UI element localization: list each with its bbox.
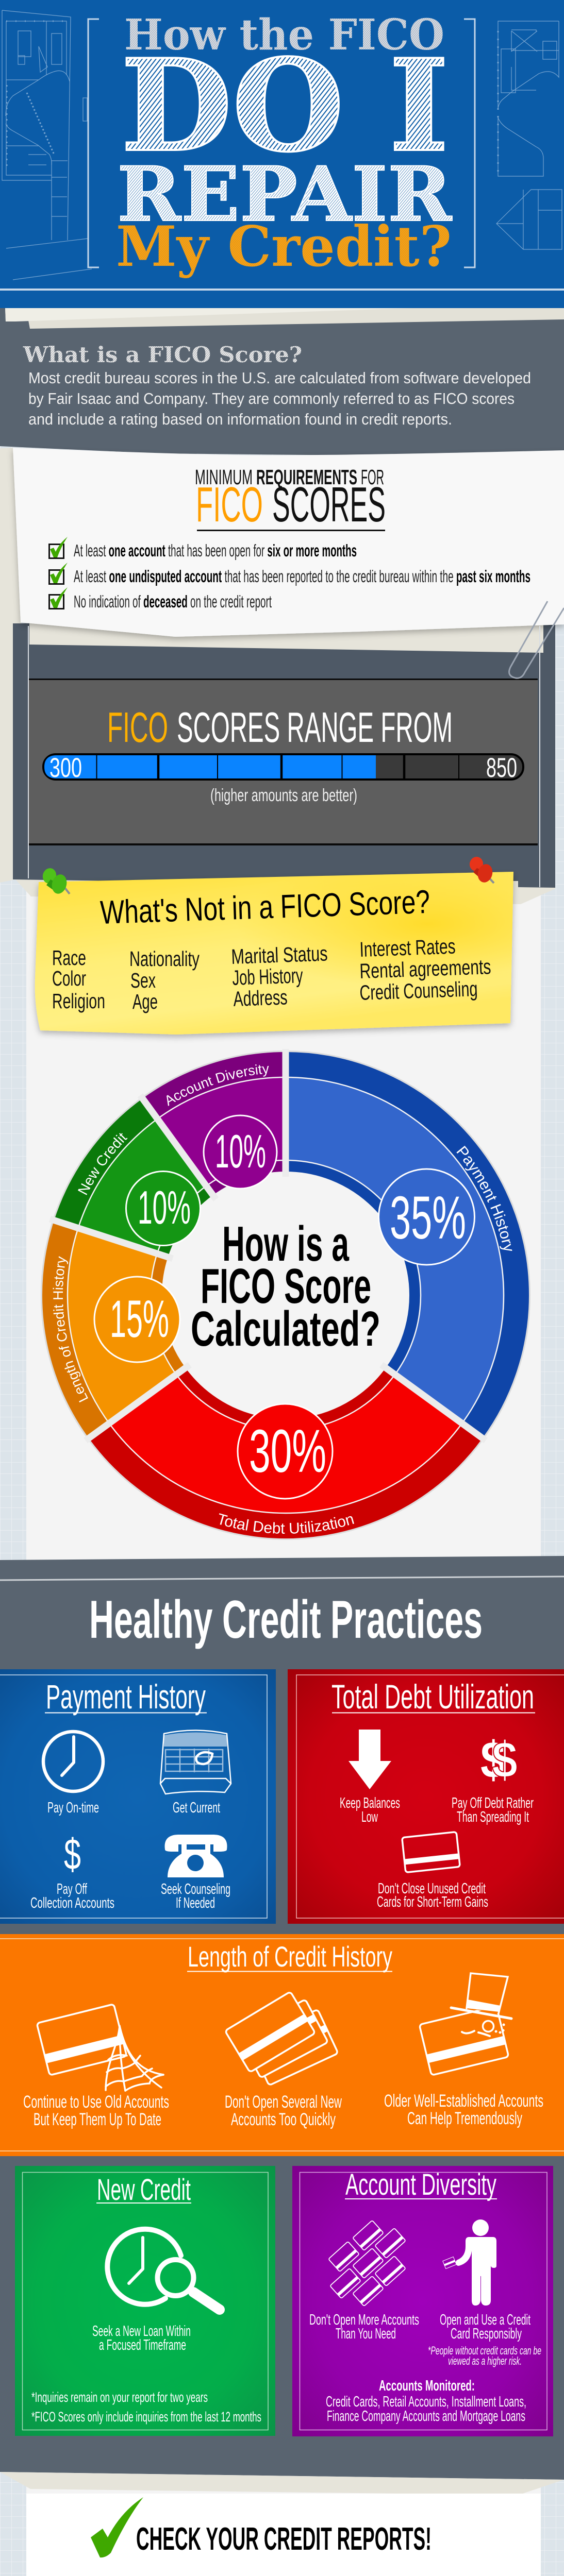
item: one account [49,537,357,560]
icon: card with top hat and monocle [419,1973,511,2075]
badge: 30%: 30% [249,1417,326,1485]
label: Don't Open Several New Accounts: Don't Open Several New [225,2092,342,2112]
panel: total debt utilization [288,1669,564,1924]
chart: FICO score donut [41,1050,530,1540]
icon: green check [91,2497,143,2557]
icon: down arrow [349,1730,391,1789]
badge: new credit 10% [126,1172,200,1246]
icon: stack of cards [225,1992,338,2086]
label: Seek Counseling If Needed: Seek Counseling [161,1881,230,1897]
list columns: Nationality [129,947,200,971]
label: Seek a New Loan: Seek a New Loan Within [92,2323,191,2340]
range bar: 300 [49,753,82,783]
panel: check your credit reports [26,2494,541,2576]
title brackets [88,19,475,267]
title: How the FICO: How the FICO [124,10,444,60]
label: Keep Balances Low [340,1795,400,1825]
center title: How is a [222,1216,349,1272]
range bar: 850 [486,753,517,783]
list columns: Marital Status [231,941,328,969]
heading: minimum requirements for: FOR [361,465,384,489]
note: higher risk: viewed as a higher risk. [448,2354,522,2367]
center title [191,1216,380,1357]
label: Total Debt Utilization: Total Debt Utilization [219,1513,354,1534]
badge: 35%: 35% [390,1184,466,1252]
white paper page [26,876,541,2576]
label: Don't Open More Accounts: Don't Open More Accounts [309,2312,419,2328]
label: Keep Balances Low: Keep Balances [340,1795,400,1811]
label: Don't Open Several New Accounts: Accounts Too Quickly [231,2110,336,2129]
segment: length of credit history 15% [29,1039,542,1551]
segment: account diversity 10% [29,1039,542,1551]
list columns: Rental agreements [359,955,491,983]
label: Don't Close Unused Credit Cards [377,1880,488,1910]
label: Don't Open More Accounts: Than You Need [336,2326,396,2342]
icon: seven cards [328,2221,406,2306]
panel: new credit [15,2166,275,2436]
list columns: Interest Rates [359,935,456,961]
label: Continue to Use Old Accounts: But Keep Them Up To Date [34,2110,161,2129]
sticky note: what's not in a FICO score [35,855,513,1035]
slate clipboard panel [13,623,555,888]
icon: double dollar: $ [492,1731,518,1789]
icon: red push pin [468,855,494,884]
label: Pay Off Collection Accounts [30,1881,114,1911]
footnotes: *Inquiries remain on your report for two years [31,2389,208,2405]
accounts monitored list [326,2378,526,2425]
intro paragraph [28,369,531,428]
label: Don't Close Unused Credit Cards: Don't Close Unused Credit [378,1880,486,1897]
label: Continue to Use Old Accounts: Continue to Use Old Accounts [23,2092,169,2112]
label: Pay Off Debt Rather Than Spreading It [452,1795,534,1825]
beige paper under requirements [29,613,543,653]
heading: minimum requirements for: MINIMUM [195,465,253,489]
label: Pay Off Collection Accounts: Pay Off [57,1881,88,1897]
list columns: Race [52,946,86,970]
label: Get Current: Get Current [173,1800,220,1816]
panel: payment history [0,1669,276,1924]
section: healthy credit practices background [0,1556,564,2480]
label: Seek a New Loan [92,2323,191,2353]
label: Keep Balances Low: Low [361,1809,378,1825]
badge: account diversity 10% [204,1115,277,1189]
panel: minimum requirements paper [13,448,564,637]
list columns: Address [233,985,288,1011]
item: one account: At least one account that has been open for six or more months [74,541,357,560]
heading: FICO scores range from [107,703,453,751]
label: Don't Open More Accounts [309,2312,419,2342]
label: Open and Use a Credit Card [440,2312,530,2342]
icon: calendar [160,1730,231,1794]
icon: card with cobweb [37,2004,163,2091]
heading: FICO scores range from: FICO [107,703,168,751]
list columns: Credit Counseling [359,977,478,1005]
heading: minimum requirements for [195,465,384,489]
heading: What is a FICO Score?: What is a FICO Score? [23,342,302,367]
range bar [43,753,523,783]
list columns: Color [52,967,86,990]
blueprint drawing: left floor plan [2,10,92,280]
gray intro section with paper edges [0,308,564,904]
beige paper below practices [0,2472,564,2495]
label: Pay Off Collection Accounts: Collection Accounts [30,1895,114,1911]
icon: credit card [402,1832,460,1872]
center title: Calculated? [191,1301,380,1357]
blueprint drawing: right floor plans [496,21,562,249]
label: Seek Counseling If Needed: If Needed [176,1895,215,1911]
heading: minimum requirements for: REQUIREMENTS [256,465,357,489]
segment: new credit 10% [54,1064,517,1527]
item: no indication of deceased [49,587,272,611]
label: Don't Open Several New Accounts [225,2092,342,2129]
label: Length of Credit History: Length of Credit History [53,1256,88,1402]
accounts monitored list: Accounts Monitored: [379,2378,475,2394]
icon: double dollar: $ [480,1731,506,1789]
panel: length of credit history [0,1934,564,2156]
list columns: Age [132,990,158,1013]
heading: FICO scores: SCORES [272,477,386,532]
label: Payment History: Payment History [457,1146,512,1251]
label: Older Well-Established Accounts [384,2091,543,2128]
title: New Credit [97,2173,191,2207]
icon: green push pin [41,867,70,895]
title: My Credit?: My Credit? [116,214,452,279]
badge: account diversity 10%: 10% [215,1126,266,1178]
checklist [49,537,530,611]
label: Pay On-time: Pay On-time [47,1800,99,1816]
note: higher risk [428,2344,541,2367]
list columns [52,935,491,1013]
list columns: Job History [232,963,304,990]
icon: person holding a card [443,2219,496,2306]
beige paper under slate panel [30,881,518,903]
heading: FICO scores: FICO [196,477,263,532]
icon: clock [43,1732,103,1791]
icon: telephone [165,1835,227,1877]
paperclip top [509,601,564,678]
intro paragraph: and include a rating based on information found in credit reports. [28,410,452,428]
label: Account Diversity: Account Diversity [167,1064,269,1106]
blueprint header panel [0,0,564,308]
label: Seek a New Loan: a Focused Timeframe [99,2337,186,2353]
label: Don't Close Unused Credit Cards: Cards for Short-Term Gains [377,1894,488,1910]
label: Seek Counseling If Needed [161,1881,230,1911]
panel: FICO score range [28,626,540,887]
icon: clock with magnifier [107,2229,220,2310]
badge: 15%: 15% [110,1290,169,1348]
center title: FICO Score [201,1259,371,1314]
intro paragraph: by Fair Isaac and Company. They are commonly referred to as FICO scores [28,389,515,408]
list columns: Sex [130,969,156,992]
footnotes: *FICO Scores only include inquiries from the last 12 months [31,2409,261,2425]
segment: payment history 35% [102,1112,469,1479]
heading: What's Not in a FICO Score? [99,883,430,931]
icon: dollar sign: $ [64,1830,81,1878]
title: DO I: DO I [121,31,449,180]
caption: higher amounts are better: (higher amounts are better) [210,786,357,805]
label: New Credit: New Credit [78,1133,128,1195]
title: Payment History [46,1677,206,1716]
badge: 30% [238,1404,333,1499]
badge: new credit 10%: 10% [138,1182,191,1234]
segment: total debt utilization 30% [29,1039,542,1551]
item: no indication of deceased: No indication of deceased on the credit report [74,592,272,611]
label: Continue to Use Old Accounts [23,2092,169,2129]
title: Length of Credit History [188,1940,392,1973]
footnotes [31,2389,261,2425]
intro paragraph: Most credit bureau scores in the U.S. are calculated from software developed [28,369,531,387]
badge: 35% [378,1169,474,1265]
title: REPAIR: REPAIR [117,150,453,239]
badge: 15% [94,1277,180,1362]
panel: account diversity [292,2166,553,2436]
heading: FICO scores [196,477,386,532]
list columns: Religion [52,989,105,1013]
